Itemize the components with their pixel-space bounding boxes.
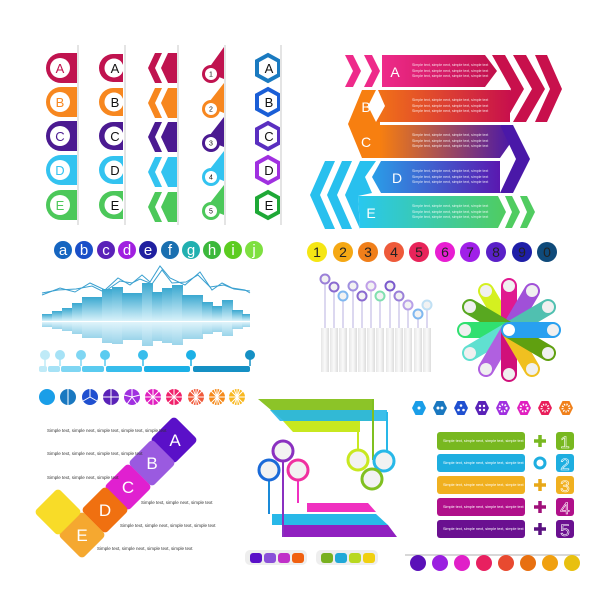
band text: Simple text, simple next, simple text, simple text — [412, 104, 488, 108]
column 5: hexagons: A — [265, 61, 274, 76]
panel: numbered text bars: Simple text, simple next, simple text, simple text — [443, 527, 525, 531]
band B and C — [348, 90, 530, 193]
panel: diamond steps: A — [169, 431, 181, 450]
column 5: hexagons — [257, 45, 281, 225]
band B and C: B — [361, 99, 371, 115]
column 4: numbered teardrops: 5 — [209, 208, 213, 216]
column 2: ring tabs: E — [111, 198, 120, 213]
alphabet circles: a — [59, 242, 68, 259]
panel: numbered text bars: 4 — [560, 499, 570, 518]
panel: numbered text bars: Simple text, simple next, simple text, simple text — [443, 439, 525, 443]
chart: lollipop piano — [320, 274, 432, 372]
panel: numbered text bars: Simple text, simple next, simple text, simple text — [443, 505, 525, 509]
band text: Simple text, simple next, simple text, simple text — [412, 215, 488, 219]
alphabet circles: g — [187, 242, 195, 259]
alphabet circles — [54, 241, 263, 259]
band B and C: C — [361, 134, 371, 150]
column 2: ring tabs: B — [111, 95, 119, 110]
number circles: 1 — [313, 244, 321, 260]
panel: diamond steps: Simple text, simple next, simple text, simple text — [97, 546, 193, 551]
column 2: ring tabs: A — [111, 61, 120, 76]
panel: diamond steps: Simple text, simple next, simple text, simple text — [120, 523, 216, 528]
panel: letter tab columns — [46, 45, 281, 225]
number circles: 8 — [492, 244, 500, 260]
number circles: 6 — [441, 244, 449, 260]
band text: Simple text, simple next, simple text, simple text — [412, 210, 488, 214]
alphabet circles: i — [231, 242, 235, 259]
number circles: 4 — [390, 244, 398, 260]
band text: Simple text, simple next, simple text, simple text — [412, 139, 488, 143]
pie icons row — [39, 389, 245, 405]
hexagon icons row — [412, 401, 573, 415]
panel: diamond steps: Simple text, simple next, simple text — [141, 500, 213, 505]
column 5: hexagons: C — [264, 129, 274, 144]
panel: diamond steps: Simple text, simple next, simple text — [47, 475, 119, 480]
column 4: numbered teardrops: 2 — [209, 106, 213, 114]
column 1: solid tabs: D — [55, 163, 65, 178]
band A: A — [390, 64, 400, 80]
number circles: 9 — [518, 244, 526, 260]
chart: flower — [459, 280, 559, 380]
column 4: numbered teardrops: 3 — [209, 140, 213, 148]
band text: Simple text, simple next, simple text, simple text — [412, 133, 488, 137]
band text: Simple text, simple next, simple text, simple text — [412, 109, 488, 113]
alphabet circles: b — [80, 242, 88, 259]
column 1: solid tabs: B — [56, 95, 64, 110]
alphabet circles: f — [168, 242, 173, 259]
band text: Simple text, simple next, simple text, simple text — [412, 175, 488, 179]
column 2: ring tabs: D — [110, 163, 120, 178]
alphabet circles: h — [208, 242, 216, 259]
number circles: 7 — [466, 244, 474, 260]
panel: numbered text bars: 5 — [560, 521, 570, 540]
panel: numbered text bars: Simple text, simple next, simple text, simple text — [443, 483, 525, 487]
panel: numbered text bars: 1 — [560, 433, 570, 452]
column 1: solid tabs: C — [55, 129, 65, 144]
alphabet circles: c — [102, 242, 110, 259]
panel: Z-shaped bands with circles — [258, 399, 397, 537]
column 1: solid tabs: A — [56, 61, 65, 76]
panel: diamond steps: B — [146, 454, 158, 473]
band A — [345, 55, 562, 122]
band D and E: E — [366, 205, 376, 221]
panel: numbered text bars: Simple text, simple next, simple text, simple text — [443, 461, 525, 465]
panel: diamond steps: Simple text, simple next, simple text, simple text, simple text — [47, 428, 167, 433]
panel: diamond steps — [34, 416, 216, 559]
panel: diamond steps: E — [76, 526, 88, 545]
band D and E: D — [392, 170, 402, 186]
band text: Simple text, simple next, simple text, simple text — [412, 204, 488, 208]
band text: Simple text, simple next, simple text, simple text — [412, 69, 488, 73]
band text: Simple text, simple next, simple text, simple text — [412, 180, 488, 184]
band text: Simple text, simple next, simple text, simple text — [412, 63, 488, 67]
band text: Simple text, simple next, simple text, simple text — [412, 74, 488, 78]
column 4: numbered teardrops — [202, 45, 225, 225]
column 5: hexagons: D — [264, 163, 274, 178]
column 5: hexagons: B — [265, 95, 273, 110]
alphabet circles: e — [144, 242, 152, 259]
column 1: solid tabs — [46, 45, 78, 225]
alphabet circles: d — [123, 242, 131, 259]
panel: arrow bands A-E — [310, 55, 562, 229]
color swatch bars — [245, 550, 378, 565]
column 1: solid tabs: E — [56, 198, 65, 213]
number circles: 0 — [543, 244, 551, 260]
band text: Simple text, simple next, simple text, simple text — [412, 169, 488, 173]
bottom color circles — [405, 555, 580, 571]
panel: diamond steps: C — [122, 478, 134, 497]
band text: Simple text, simple next, simple text, simple text — [412, 98, 488, 102]
number circles — [307, 242, 557, 262]
alphabet circles: j — [251, 242, 256, 259]
panel: diamond steps: D — [99, 501, 111, 520]
band text: Simple text, simple next, simple text, simple text — [412, 144, 488, 148]
band text — [412, 63, 488, 219]
panel: numbered text bars — [437, 432, 574, 540]
column 2: ring tabs: C — [110, 129, 120, 144]
panel: diamond steps: Simple text, simple next, simple text, simple text — [47, 451, 143, 456]
band D and E — [310, 161, 535, 229]
number circles: 5 — [415, 244, 423, 260]
column 2: ring tabs — [99, 45, 125, 225]
column 4: numbered teardrops: 1 — [209, 72, 213, 78]
column 3: chevrons — [148, 45, 178, 225]
column 5: hexagons: E — [265, 198, 274, 213]
number circles: 2 — [339, 244, 347, 260]
chart: skyline with line graph — [42, 266, 250, 346]
panel: numbered text bars: 2 — [560, 455, 570, 474]
column 4: numbered teardrops: 4 — [209, 174, 213, 182]
number circles: 3 — [364, 244, 372, 260]
timeline with pins — [39, 350, 255, 372]
panel: numbered text bars: 3 — [560, 477, 570, 496]
